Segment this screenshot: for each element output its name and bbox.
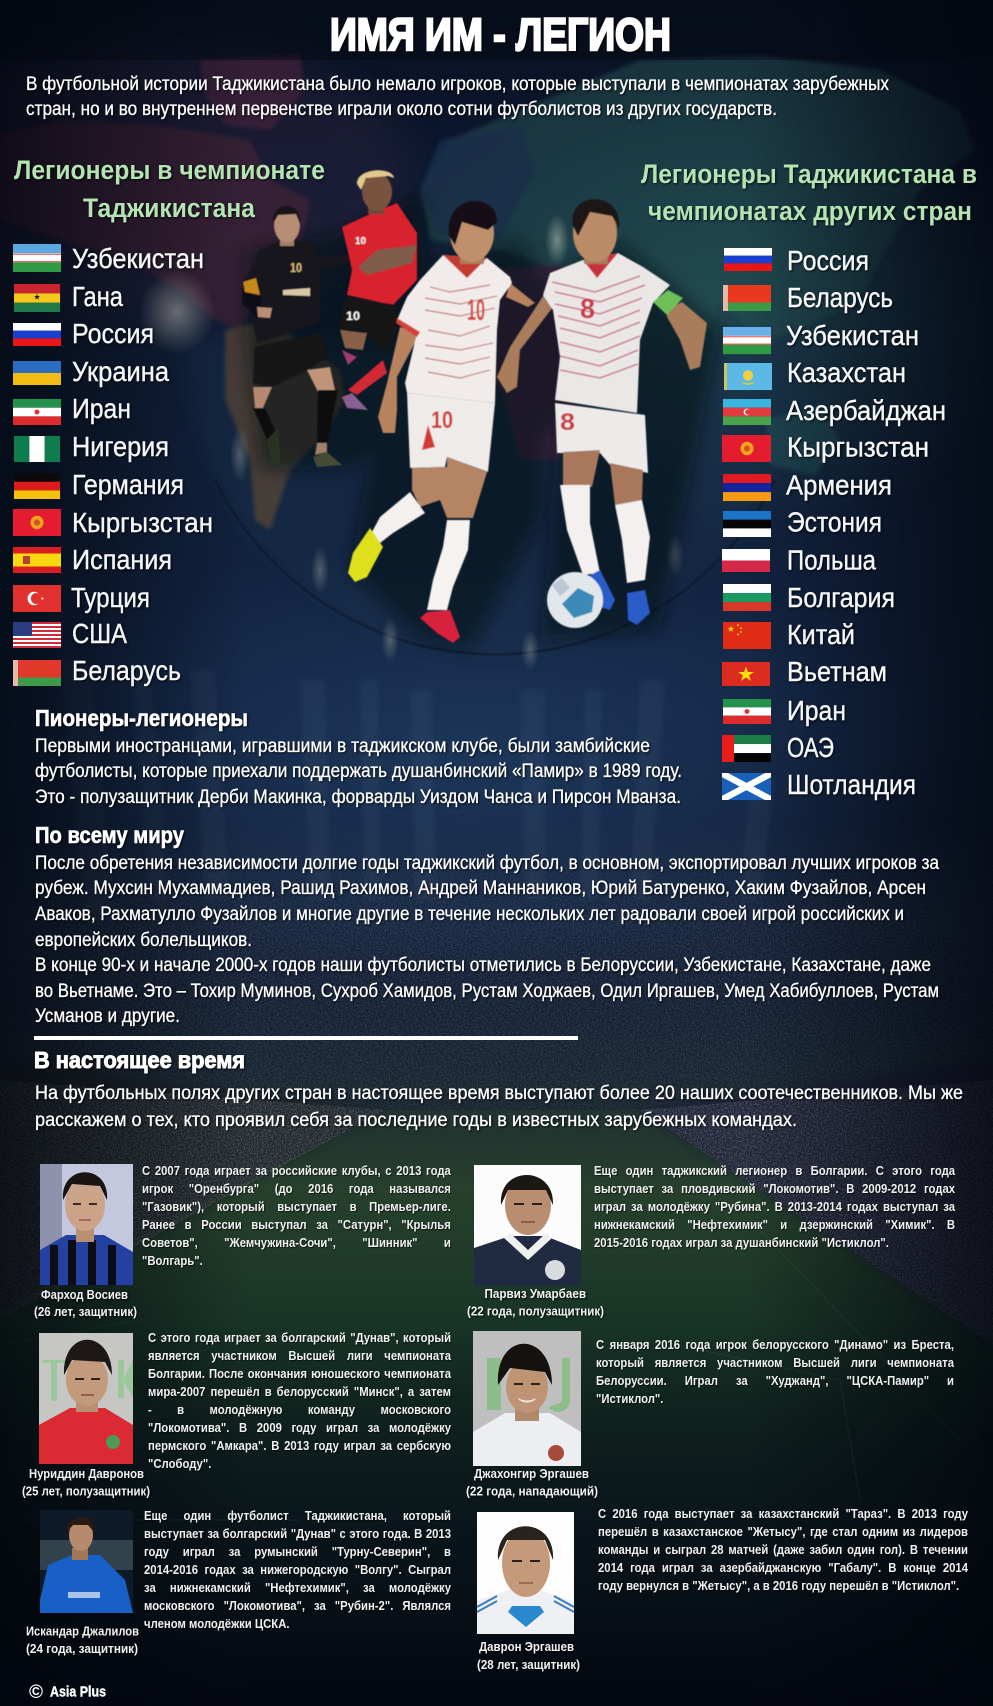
row: Vietnam bbox=[722, 656, 887, 687]
row: Scotland bbox=[722, 769, 916, 800]
bio: Даврон Эргашев: году вернулся в "Жетысу", а в 2016 году перешёл в "Истиклол". bbox=[598, 1578, 959, 1592]
caption: Фарход Восиев: (26 лет, защитник) bbox=[34, 1304, 137, 1319]
caption: Нуриддин Давронов: (25 лет, полузащитник) bbox=[22, 1484, 150, 1498]
photo: Парвиз Умарбаев bbox=[474, 1165, 581, 1286]
row: Kyrgyzstan bbox=[13, 507, 213, 538]
player: black kit bbox=[242, 206, 373, 467]
bio: Парвиз Умарбаев: выступает за пловдивский "Локомотив". В 2009-2012 годах bbox=[594, 1180, 955, 1196]
heading: left list bbox=[14, 155, 325, 223]
row: Iran bbox=[723, 695, 846, 726]
bio: Фарход Восиев: Ранее в России выступал за "Сатурн", "Крылья bbox=[142, 1216, 451, 1232]
row: Iran: Иран bbox=[787, 695, 846, 726]
bio: Нуриддин Давронов: мира-2007 перешёл в белорусский "Минск", а затем bbox=[148, 1384, 451, 1398]
bio: Нуриддин Давронов: "Слободу". bbox=[148, 1456, 211, 1470]
row: Bulgaria bbox=[723, 582, 895, 613]
bio: Фарход Восиев: С 2007 года играет за российские клубы, с 2013 года bbox=[142, 1162, 451, 1178]
row: Iran: Иран bbox=[72, 393, 131, 424]
row: Spain bbox=[13, 544, 172, 575]
bio: Искандар Джалилов: за нижнекамский "Нефтехимик", за молодёжку bbox=[144, 1580, 451, 1594]
section: around the world: Аваков, Рахматулло Фузайлов и многие другие в течение нескольких лет радовали своей игрой российских и bbox=[35, 904, 904, 925]
bio: Даврон Эргашев: перешёл в казахстанское "Жетысу", где стал одним из лидеров bbox=[598, 1524, 968, 1538]
bio: Парвиз Умарбаев bbox=[594, 1162, 956, 1251]
player: red kit bbox=[340, 170, 417, 410]
players group bbox=[242, 170, 720, 650]
caption: Парвиз Умарбаев: Парвиз Умарбаев bbox=[484, 1286, 586, 1301]
row: Russia bbox=[724, 245, 869, 276]
section: present time: На футбольных полях других стран в настоящее время выступают более 20 наших соотечественников. Мы же bbox=[35, 1083, 963, 1104]
section: present time: расскажем о тех, кто проявил себя за последние годы в известных зарубежных командах. bbox=[35, 1110, 797, 1131]
photo: Джахонгир Эргашев bbox=[473, 1331, 581, 1466]
player: red kit: 10 bbox=[355, 236, 366, 247]
heading: right list bbox=[641, 159, 977, 226]
bio: Джахонгир Эргашев: который является участником Высшей лиги чемпионата bbox=[596, 1354, 954, 1370]
bio: Нуриддин Давронов bbox=[148, 1330, 452, 1472]
row: Vietnam: Вьетнам bbox=[787, 656, 887, 687]
photo: Фарход Восиев bbox=[40, 1164, 133, 1285]
caption: Джахонгир Эргашев: (22 года, нападающий) bbox=[466, 1484, 598, 1498]
player: number 8 white kit with ball: 8 bbox=[560, 409, 575, 436]
bio: Джахонгир Эргашев bbox=[596, 1336, 954, 1406]
row: Ukraine: Украина bbox=[72, 356, 169, 387]
section: around the world: Усманов и другие. bbox=[35, 1006, 180, 1027]
bio: Нуриддин Давронов: С этого года играет за болгарский "Дунав", который bbox=[148, 1330, 451, 1344]
title: ИМЯ ИМ - ЛЕГИОН bbox=[330, 9, 671, 60]
section: present time: В настоящее время bbox=[34, 1047, 245, 1073]
caption: Даврон Эргашев: (28 лет, защитник) bbox=[477, 1657, 580, 1672]
row: Ghana bbox=[14, 281, 123, 312]
bio: Джахонгир Эргашев: С января 2016 года игрок белорусского "Динамо" из Бреста, bbox=[596, 1336, 954, 1352]
row: Bulgaria: Болгария bbox=[787, 582, 895, 613]
player: number 8 white kit with ball bbox=[497, 199, 707, 628]
row: Germany bbox=[14, 469, 184, 500]
row: Russia: Россия bbox=[72, 318, 154, 349]
caption: Нуриддин Давронов bbox=[22, 1466, 150, 1498]
row: Belarus bbox=[13, 655, 181, 686]
heading: left list: Таджикистана bbox=[83, 193, 256, 223]
player: number 10 white kit: 10 bbox=[467, 294, 485, 327]
bio: Фарход Восиев: "Газовик"), который выступает в Премьер-лиге. bbox=[142, 1198, 451, 1214]
bio: Искандар Джалилов: 2014-2016 годах за нижегородскую "Волгу". Сыграл bbox=[144, 1562, 451, 1576]
section: around the world bbox=[35, 822, 939, 1027]
section: present time bbox=[34, 1047, 963, 1131]
row: Kyrgyzstan: Кыргызстан bbox=[72, 507, 213, 538]
section: pioneers: Пионеры-легионеры bbox=[35, 705, 248, 731]
credit: Asia Plus: Asia Plus bbox=[50, 1684, 106, 1700]
caption: Джахонгир Эргашев bbox=[466, 1466, 598, 1498]
bio: Нуриддин Давронов: пермского "Амкара". В 2013 году играл за сербскую bbox=[148, 1438, 451, 1452]
bio: Нуриддин Давронов: является участником Высшей лиги чемпионата bbox=[148, 1348, 451, 1362]
caption: Даврон Эргашев bbox=[477, 1639, 580, 1672]
bio: Парвиз Умарбаев: 2015-2016 годах играл за душанбинский "Истиклол". bbox=[594, 1234, 889, 1250]
caption: Даврон Эргашев: Даврон Эргашев bbox=[479, 1639, 574, 1654]
row: China bbox=[723, 619, 855, 650]
bio: Парвиз Умарбаев: Еще один таджикский легионер в Болгарии. С этого года bbox=[594, 1162, 955, 1178]
player shadows bbox=[245, 195, 720, 650]
row: Russia: Россия bbox=[787, 245, 869, 276]
section: around the world: рубеж. Мухсин Мухаммадиев, Рашид Рахимов, Андрей Маннаников, Юрий Батуренко, Хаким Фузайлов, Арсен bbox=[35, 878, 926, 899]
bio: Фарход Восиев: "Волгарь". bbox=[142, 1252, 203, 1268]
row: Uzbekistan: Узбекистан bbox=[786, 320, 919, 351]
row: Russia bbox=[13, 318, 154, 349]
section: around the world: европейских болельщиков. bbox=[35, 930, 252, 951]
row: Armenia: Армения bbox=[786, 470, 892, 500]
row: Ukraine bbox=[13, 356, 169, 387]
intro text: стран, но и во внутреннем первенстве играли около сотни футболистов из других государств. bbox=[26, 99, 777, 120]
caption: Искандар Джалилов: Искандар Джалилов bbox=[26, 1624, 139, 1638]
row: UAE bbox=[722, 732, 834, 763]
left country list bbox=[13, 243, 213, 686]
bio: Искандар Джалилов: году играл за румынский "Турну-Северин", в bbox=[144, 1544, 451, 1558]
bio: Парвиз Умарбаев: нижнекамский "Нефтехимик" и дзержинский "Химик". В bbox=[594, 1216, 955, 1232]
row: Turkey: Турция bbox=[71, 582, 150, 613]
bio: Фарход Восиев: Советов", "Жемчужина-Сочи", "Шинник" и bbox=[142, 1234, 451, 1250]
row: Kazakhstan bbox=[724, 357, 906, 390]
row: Azerbaijan: Азербайджан bbox=[786, 395, 946, 426]
photo: Нуриддин Давронов bbox=[39, 1333, 133, 1464]
section: pioneers: футболисты, которые приехали поддержать душанбинский «Памир» в 1989 году. bbox=[35, 761, 682, 782]
bio: Нуриддин Давронов: "Локомотива". В 2009 году играл за молодёжку bbox=[148, 1420, 451, 1434]
bio: Даврон Эргашев bbox=[598, 1506, 968, 1594]
bio: Даврон Эргашев: команды и сыграл 28 матчей (даже забил один гол). В течении bbox=[598, 1542, 968, 1556]
row: USA: США bbox=[72, 618, 127, 649]
bio: Парвиз Умарбаев: играл за молодёжку "Рубина". В 2013-2014 годах выступал за bbox=[594, 1198, 955, 1214]
player: number 10 white kit bbox=[348, 201, 535, 643]
row: Nigeria bbox=[14, 431, 169, 462]
caption: Искандар Джалилов bbox=[26, 1624, 139, 1656]
bio: Даврон Эргашев: С 2016 года выступает за казахстанский "Тараз". В 2013 году bbox=[598, 1506, 968, 1520]
caption: Искандар Джалилов: (24 года, защитник) bbox=[26, 1641, 138, 1656]
section: pioneers bbox=[35, 705, 682, 808]
credit: Asia Plus bbox=[29, 1682, 106, 1703]
row: Poland: Польша bbox=[787, 544, 876, 576]
row: Uzbekistan: Узбекистан bbox=[72, 243, 204, 274]
player: number 8 white kit with ball: 8 bbox=[580, 293, 595, 324]
section: around the world: По всему миру bbox=[35, 822, 184, 848]
row: Ghana: Гана bbox=[72, 281, 123, 312]
row: Armenia bbox=[723, 470, 892, 501]
row: Belarus: Беларусь bbox=[787, 282, 893, 313]
caption: Нуриддин Давронов: Нуриддин Давронов bbox=[29, 1466, 144, 1481]
row: Belarus: Беларусь bbox=[72, 655, 181, 686]
right country list bbox=[722, 245, 946, 800]
bio: Джахонгир Эргашев: Белоруссии. Играл за "Худжанд", "ЦСКА-Памир" и bbox=[596, 1372, 954, 1388]
row: Iran bbox=[13, 393, 131, 425]
intro text bbox=[26, 74, 889, 120]
caption: Парвиз Умарбаев bbox=[467, 1286, 604, 1318]
bio: Фарход Восиев bbox=[142, 1162, 452, 1268]
bio: Искандар Джалилов: московского "Локомотива", за "Рубин-2". Являлся bbox=[144, 1598, 451, 1612]
row: Nigeria: Нигерия bbox=[72, 431, 169, 462]
bio: Искандар Джалилов: членом молодёжки ЦСКА. bbox=[144, 1616, 290, 1630]
section: pioneers: Первыми иностранцами, игравшими в таджикском клубе, были замбийские bbox=[35, 736, 650, 757]
bio: Искандар Джалилов: выступает за болгарский "Дунав" с этого года. В 2013 bbox=[144, 1526, 451, 1540]
row: Kyrgyzstan: Кыргызстан bbox=[787, 432, 929, 462]
bio: Искандар Джалилов bbox=[144, 1508, 452, 1632]
bio: Даврон Эргашев: 2014 года играл за азербайджанскую "Габалу". В конце 2014 bbox=[598, 1560, 968, 1574]
row: Kyrgyzstan bbox=[722, 432, 929, 462]
row: USA bbox=[13, 618, 127, 649]
section: pioneers: Это - полузащитник Дерби Макинка, форварды Уиздом Чанса и Пирсон Мванза. bbox=[35, 787, 681, 808]
caption: Фарход Восиев: Фарход Восиев bbox=[41, 1287, 128, 1302]
credit: Asia Plus: © bbox=[29, 1682, 43, 1703]
row: Turkey bbox=[13, 582, 150, 613]
photo: Искандар Джалилов bbox=[40, 1510, 133, 1613]
row: Kazakhstan: Казахстан bbox=[787, 357, 906, 388]
bio: Нуриддин Давронов: Болгарии. После окончания юношеского чемпионата bbox=[148, 1366, 451, 1380]
row: Scotland: Шотландия bbox=[787, 769, 916, 800]
row: Uzbekistan bbox=[13, 243, 204, 274]
bio: Искандар Джалилов: Еще один футболист Таджикистана, который bbox=[144, 1508, 451, 1522]
row: Estonia bbox=[723, 506, 882, 538]
caption: Парвиз Умарбаев: (22 года, полузащитник) bbox=[467, 1304, 604, 1318]
player: red kit: 10 bbox=[346, 309, 360, 323]
row: Belarus bbox=[723, 282, 893, 313]
photo: Даврон Эргашев bbox=[477, 1512, 574, 1634]
row: Estonia: Эстония bbox=[787, 506, 882, 538]
heading: left list: Легионеры в чемпионате bbox=[14, 155, 325, 185]
player: number 10 white kit: 10 bbox=[431, 407, 453, 434]
row: Azerbaijan bbox=[723, 395, 946, 426]
row: Spain: Испания bbox=[72, 544, 172, 575]
intro text: В футбольной истории Таджикистана было немало игроков, которые выступали в чемпионатах зарубежных bbox=[26, 74, 889, 95]
row: Uzbekistan bbox=[723, 320, 919, 354]
caption: Джахонгир Эргашев: Джахонгир Эргашев bbox=[474, 1466, 589, 1481]
row: UAE: ОАЭ bbox=[787, 732, 834, 763]
bio: Джахонгир Эргашев: "Истиклол". bbox=[596, 1390, 663, 1406]
row: Germany: Германия bbox=[72, 469, 184, 500]
row: Poland bbox=[722, 544, 876, 576]
player: black kit: 10 bbox=[290, 260, 302, 275]
caption: Фарход Восиев bbox=[34, 1287, 137, 1319]
bio: Нуриддин Давронов: - в молодёжную команду московского bbox=[148, 1402, 451, 1416]
bio: Фарход Восиев: игрок "Оренбурга" (до 2016 года назывался bbox=[142, 1180, 451, 1196]
row: China: Китай bbox=[787, 619, 855, 650]
